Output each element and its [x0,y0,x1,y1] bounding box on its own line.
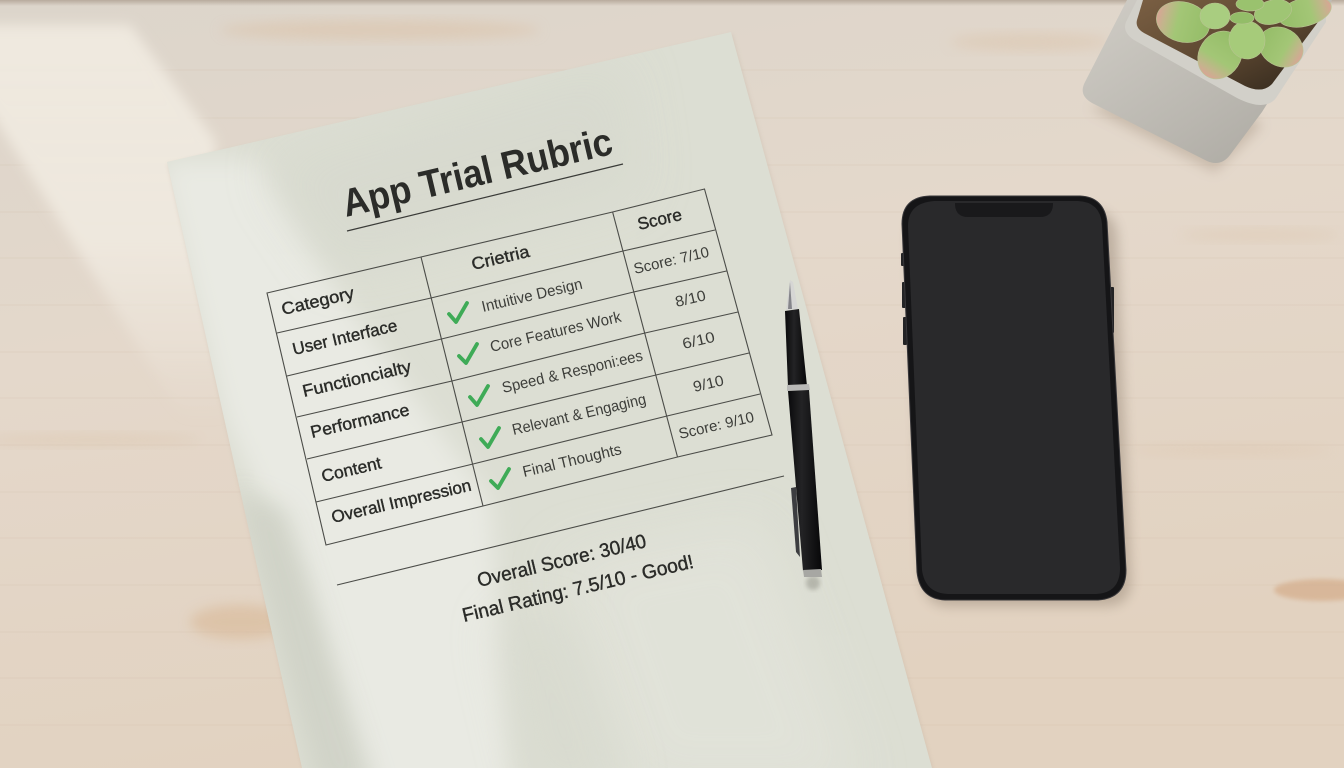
potted succulent [1083,0,1335,172]
phone screen [908,201,1120,594]
category column: Category [280,283,356,319]
criteria column: Final Thoughts [521,441,623,481]
overall score summary [337,476,784,627]
overall score summary: Overall Score: 30/40 [475,530,649,592]
soil [1137,0,1318,90]
rubric table [267,189,772,545]
score column: Score [636,205,684,234]
smartphone [901,196,1131,606]
score column: 9/10 [691,372,725,396]
score column: 8/10 [674,287,708,311]
criteria column: Core Features Work [489,309,623,356]
category column: Overall Impression [330,476,473,527]
category column [280,283,473,527]
score column: 6/10 [681,329,717,353]
paper sheet [160,32,933,768]
pen [785,280,822,590]
overall score summary: Final Rating: 7.5/10 - Good! [460,551,696,627]
category column: Functioncialty [301,357,413,401]
criteria column [470,242,648,481]
icon: side buttons [901,253,1114,345]
phone body [902,196,1126,600]
title: App Trial Rubric [338,120,617,226]
category column: User Interface [291,316,399,359]
score column: Score: 9/10 [677,409,756,443]
phone notch [955,203,1053,217]
criteria column: Crietria [470,242,532,274]
plant pot [1083,0,1332,163]
table grid [267,189,772,545]
criteria column: Speed & Responi:ees [500,347,645,397]
succulent leaves [1152,0,1335,87]
score column [632,205,756,443]
category column: Performance [309,400,411,442]
criteria column: Relevant & Engaging [511,391,648,439]
icon: green check marks [449,303,509,488]
category column: Content [320,453,384,486]
criteria column: Intuitive Design [480,276,584,316]
score column: Score: 7/10 [632,244,711,278]
